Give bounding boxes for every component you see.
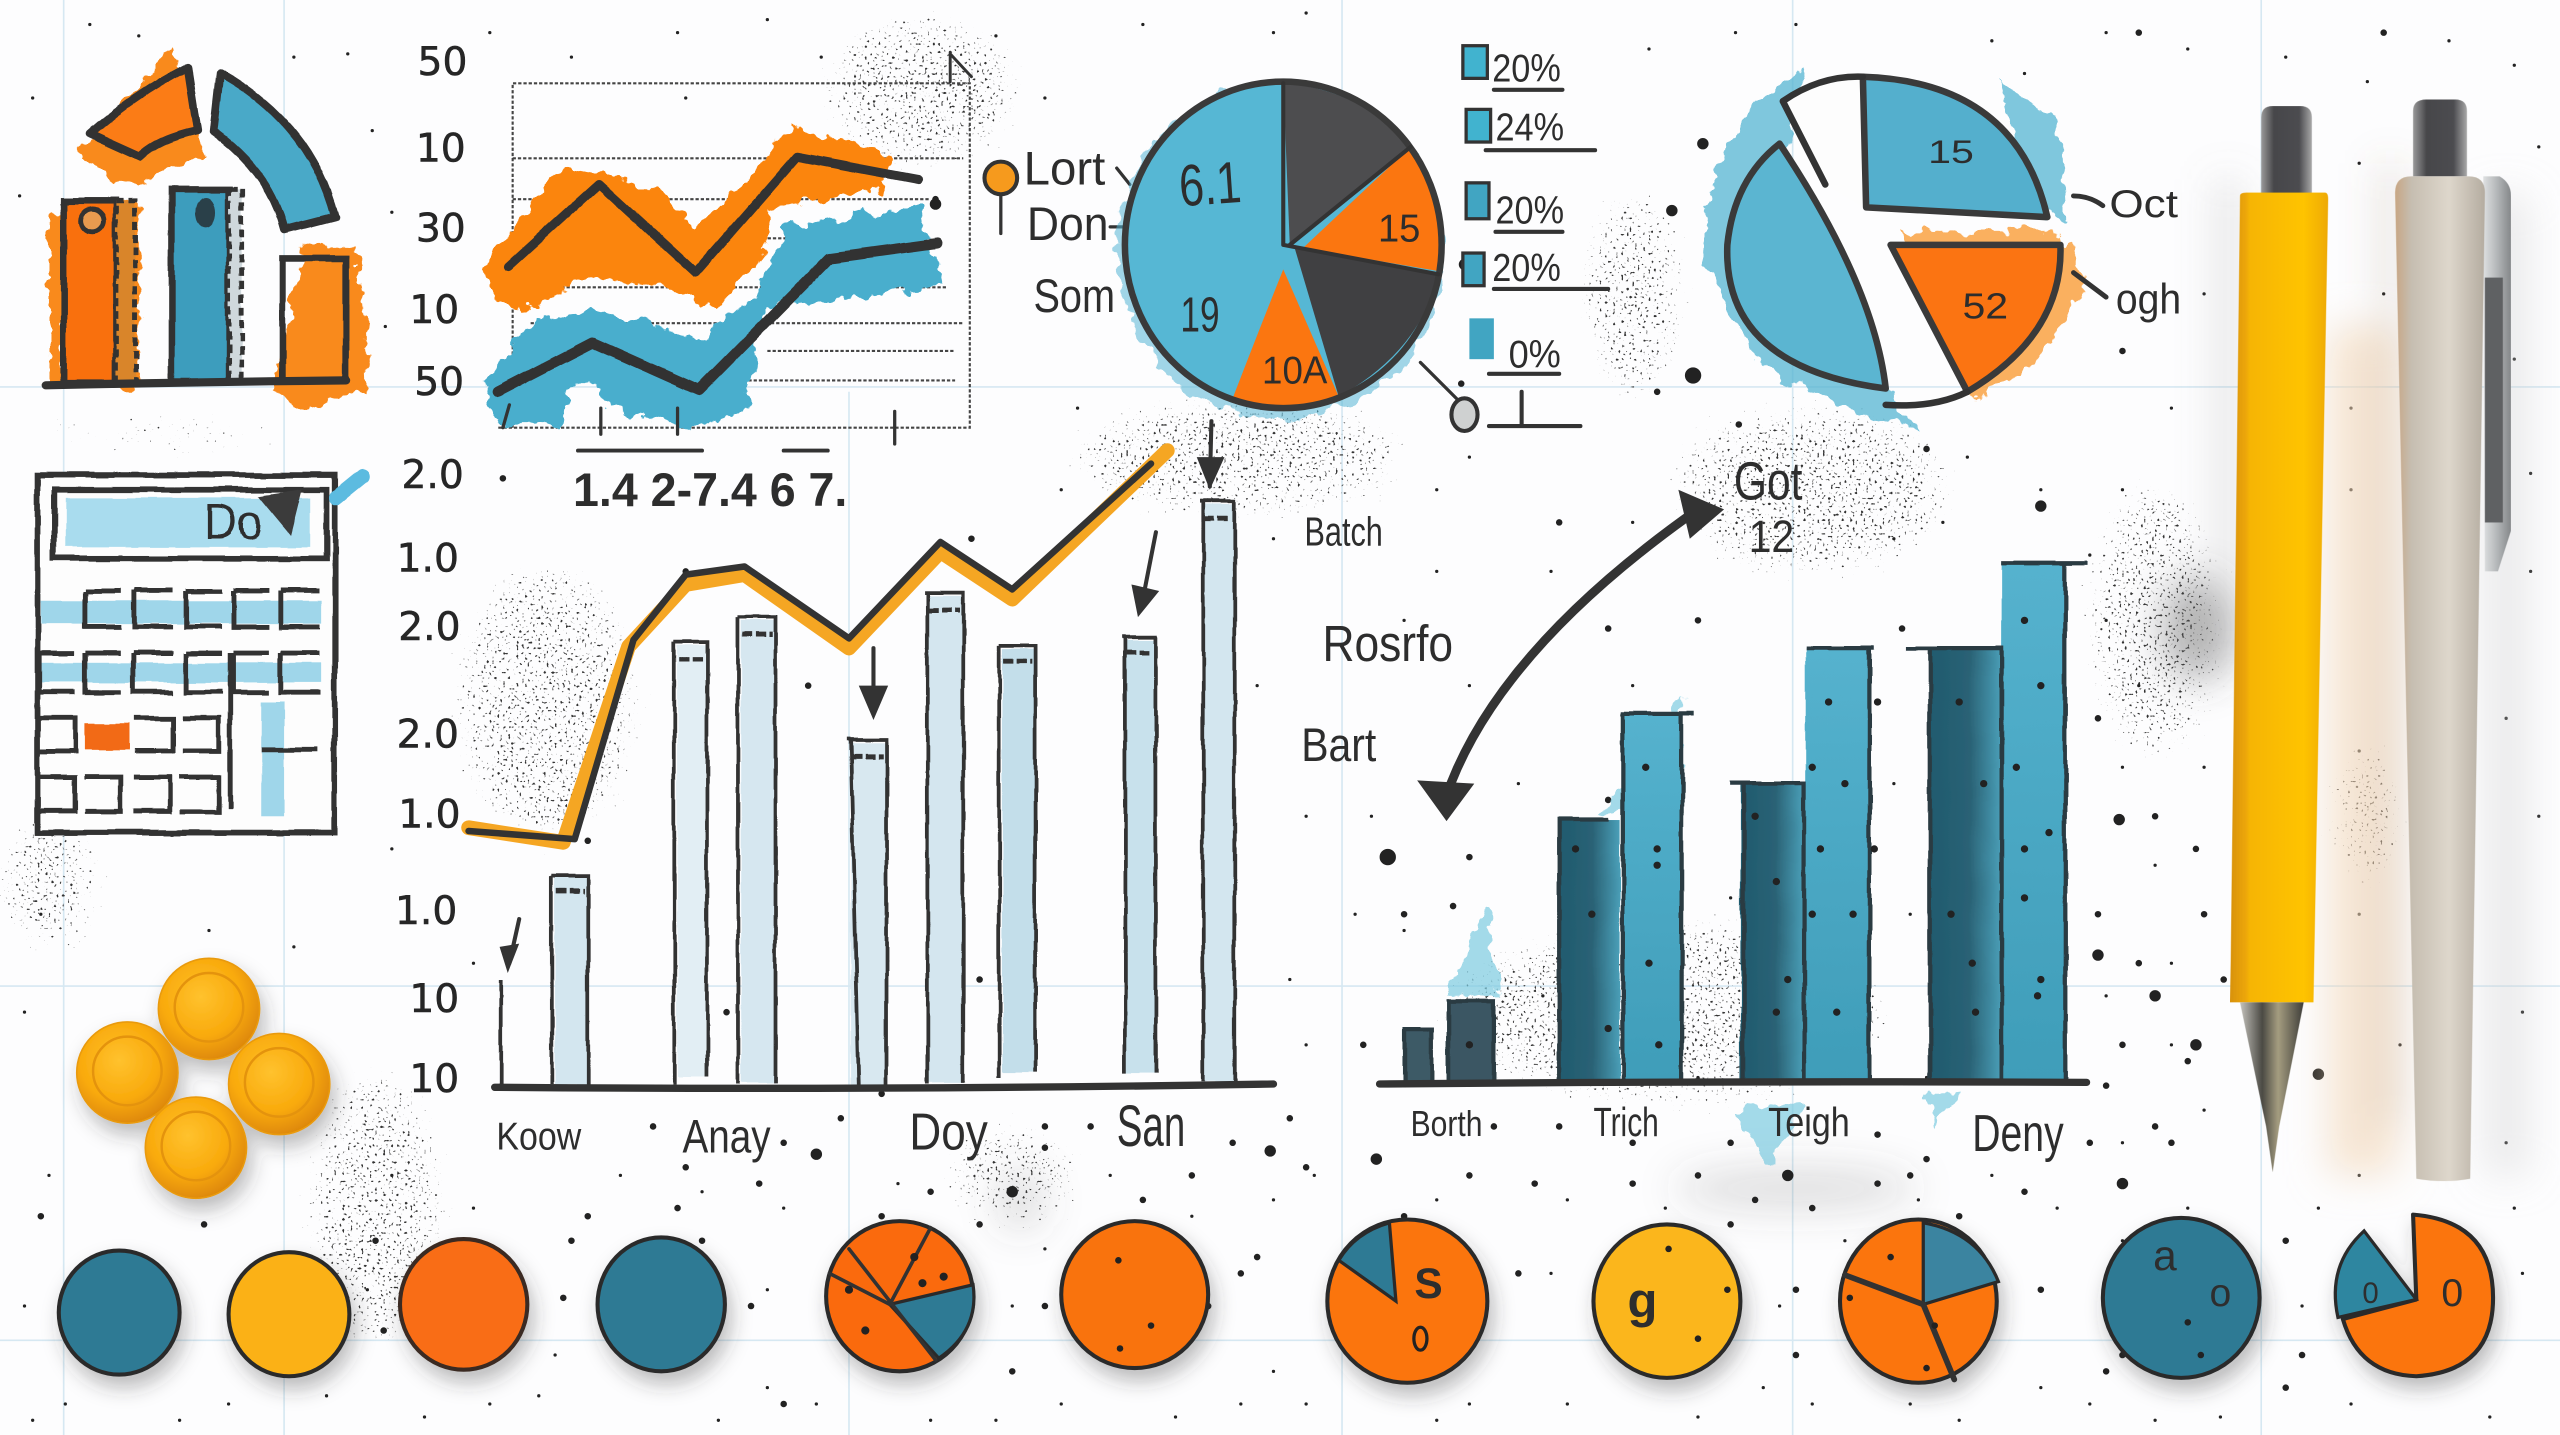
button: blue <box>598 1237 725 1371</box>
calendar frame <box>38 475 335 833</box>
legend row 20% second <box>1466 183 1564 233</box>
side labels: Bart <box>1301 719 1376 772</box>
arrows <box>500 421 1224 973</box>
washes <box>1445 694 1959 1167</box>
pie outline <box>1125 82 1442 408</box>
bar splatter <box>1469 620 2049 1045</box>
pen shadows <box>2217 163 2527 1175</box>
button: yellow: g <box>1627 1274 1657 1328</box>
y axis labels lower: 2.0 <box>398 605 461 650</box>
y axis labels lower <box>395 453 464 1102</box>
curved arrow: 12 <box>1749 511 1794 562</box>
calendar <box>38 475 362 833</box>
button: blue with marks: a <box>2153 1232 2177 1279</box>
x labels: Deny <box>1972 1105 2064 1163</box>
area: blue wash <box>485 207 944 429</box>
calendar washes <box>41 601 322 816</box>
line: blue series <box>498 243 937 392</box>
grey smudges <box>998 576 2229 1229</box>
arc remainders <box>1783 77 1967 405</box>
bars <box>1404 563 2087 1082</box>
legend row 20% third <box>1463 247 1608 290</box>
bars <box>501 501 1234 1086</box>
pen cap <box>2261 106 2312 193</box>
pie chart one <box>1117 82 1478 431</box>
button: blue with marks <box>2103 1218 2260 1378</box>
button: orange <box>400 1239 527 1370</box>
y axis labels lower: 2.0 <box>402 453 464 498</box>
y axis labels top: 50 <box>418 40 467 85</box>
x labels: Anay <box>682 1111 771 1164</box>
blue marker <box>336 477 362 498</box>
knob <box>158 958 260 1060</box>
button: blue with marks: o <box>2210 1272 2231 1315</box>
trend line: orange underlay <box>469 451 1167 842</box>
y axis labels top: 10 <box>416 127 466 172</box>
pen cap <box>2413 100 2467 176</box>
yellow pen <box>2230 106 2328 1172</box>
pie legend labels <box>984 142 1130 323</box>
pen barrel <box>2395 176 2485 1181</box>
x labels: Doy <box>909 1103 988 1161</box>
yellow knobs <box>77 958 330 1198</box>
ticks <box>503 405 895 444</box>
button row <box>59 1215 2493 1383</box>
area: orange wash <box>485 124 893 310</box>
y axis labels lower: 2.0 <box>397 713 459 758</box>
pen clip <box>2483 176 2511 571</box>
legend row 20% second: 20% <box>1496 190 1564 233</box>
button: orange open pie: 0 <box>2362 1277 2379 1310</box>
y axis labels lower: 1.0 <box>397 536 459 581</box>
pie chart one: 6.1 <box>1177 150 1243 219</box>
icon: arc and bar sketch <box>46 46 367 408</box>
calendar header: Do <box>204 496 263 550</box>
button: orange open pie <box>2335 1215 2493 1376</box>
baseline <box>495 1084 1273 1088</box>
x labels: Trich <box>1593 1099 1659 1145</box>
slice wash: orange <box>1902 232 2087 400</box>
y axis labels top: 10 <box>409 288 459 333</box>
pie chart one: 10A <box>1262 350 1328 393</box>
legend row 20% third: 20% <box>1492 247 1561 290</box>
knob <box>77 1022 178 1123</box>
slice: orange <box>1891 245 2061 392</box>
percent legend <box>1463 46 1608 426</box>
side labels <box>1301 508 1453 772</box>
pen barrel <box>2230 193 2328 1002</box>
legend row 0%: 0% <box>1509 333 1561 376</box>
legend row 20%: 20% <box>1492 48 1561 91</box>
bar: orange <box>64 201 136 384</box>
button: blue <box>59 1251 180 1375</box>
trend line: dark <box>469 464 1151 839</box>
watercolor splashes <box>49 46 367 408</box>
knob <box>229 1033 330 1135</box>
pie chart one: 15 <box>1378 208 1420 251</box>
line: orange series <box>509 157 918 273</box>
pie chart two <box>1703 69 2181 433</box>
button: orange <box>1061 1221 1208 1368</box>
y axis labels lower: 10 <box>409 1057 459 1102</box>
slice: left blue <box>1727 144 1886 389</box>
knob <box>145 1097 247 1198</box>
arc segment: orange <box>90 67 198 157</box>
bar: blue <box>171 189 242 382</box>
main bar and line chart <box>469 421 1273 1164</box>
x labels <box>1411 1099 2064 1163</box>
y axis labels top: 50 <box>414 360 464 405</box>
y axis labels lower: 1.0 <box>395 889 457 934</box>
label: Oct: Oct <box>2109 183 2178 226</box>
legend row 20% <box>1463 46 1562 91</box>
baseline <box>1380 1082 2087 1084</box>
calendar cells <box>39 591 320 811</box>
arc segment: blue <box>214 73 335 230</box>
pen tip <box>2240 1002 2304 1172</box>
side labels: Rosrfo <box>1322 615 1453 672</box>
highlighted cell <box>85 723 129 749</box>
label: ogh <box>2073 273 2181 322</box>
label: ogh: ogh <box>2116 275 2181 322</box>
pie chart two: 52 <box>1962 285 2008 326</box>
legend row 24%: 24% <box>1496 106 1564 149</box>
x labels: Koow <box>496 1115 582 1158</box>
x labels: San <box>1117 1094 1185 1159</box>
y axis labels top: 30 <box>416 207 466 252</box>
pie legend labels: Som <box>1033 270 1115 323</box>
y axis labels top <box>409 40 467 405</box>
legend row 0% <box>1469 318 1580 426</box>
line chart <box>485 52 971 444</box>
pie legend labels: Don <box>1027 198 1109 251</box>
x labels: Borth <box>1411 1103 1482 1144</box>
beige pen <box>2395 100 2511 1181</box>
curved arrow: Got <box>1734 452 1802 512</box>
slice: dark lower <box>1295 248 1438 397</box>
slice: blue base <box>1125 82 1442 408</box>
side labels: Batch <box>1304 508 1383 554</box>
tick values: 1.4 2-7.4 6 7. <box>573 464 847 517</box>
slice: orange right <box>1303 147 1439 271</box>
pie legend labels: Lort <box>1024 142 1105 195</box>
slice: dark top <box>1283 83 1411 245</box>
y axis labels lower: 10 <box>409 977 459 1022</box>
button: orange pie <box>826 1221 974 1371</box>
slice: top blue <box>1863 77 2047 217</box>
button: orange with blue slice <box>1840 1220 1998 1383</box>
pie wash <box>1703 69 2065 433</box>
pie chart two: 15 <box>1928 133 1974 170</box>
teal bar chart <box>1380 563 2087 1167</box>
baseline <box>46 380 346 385</box>
button: yellow <box>1593 1224 1740 1378</box>
pie wash <box>1117 83 1443 420</box>
legend row 24% <box>1466 106 1595 150</box>
curved arrow <box>1417 452 1802 821</box>
button: orange with blue wedge <box>1327 1220 1487 1383</box>
y axis labels lower: 1.0 <box>398 793 461 838</box>
button: yellow <box>229 1252 349 1376</box>
slice: orange lower <box>1233 269 1339 408</box>
chart frame <box>498 83 970 428</box>
button: orange open pie: 0 <box>2441 1272 2463 1315</box>
x labels: Teigh <box>1768 1099 1850 1145</box>
label: Oct <box>2073 183 2178 226</box>
calendar header <box>54 490 327 558</box>
x labels <box>496 1094 1185 1164</box>
white slice <box>1783 77 1863 207</box>
bar: outlined orange <box>282 258 346 384</box>
pie chart one: 19 <box>1180 288 1220 342</box>
button: orange with blue wedge: S <box>1414 1260 1443 1307</box>
